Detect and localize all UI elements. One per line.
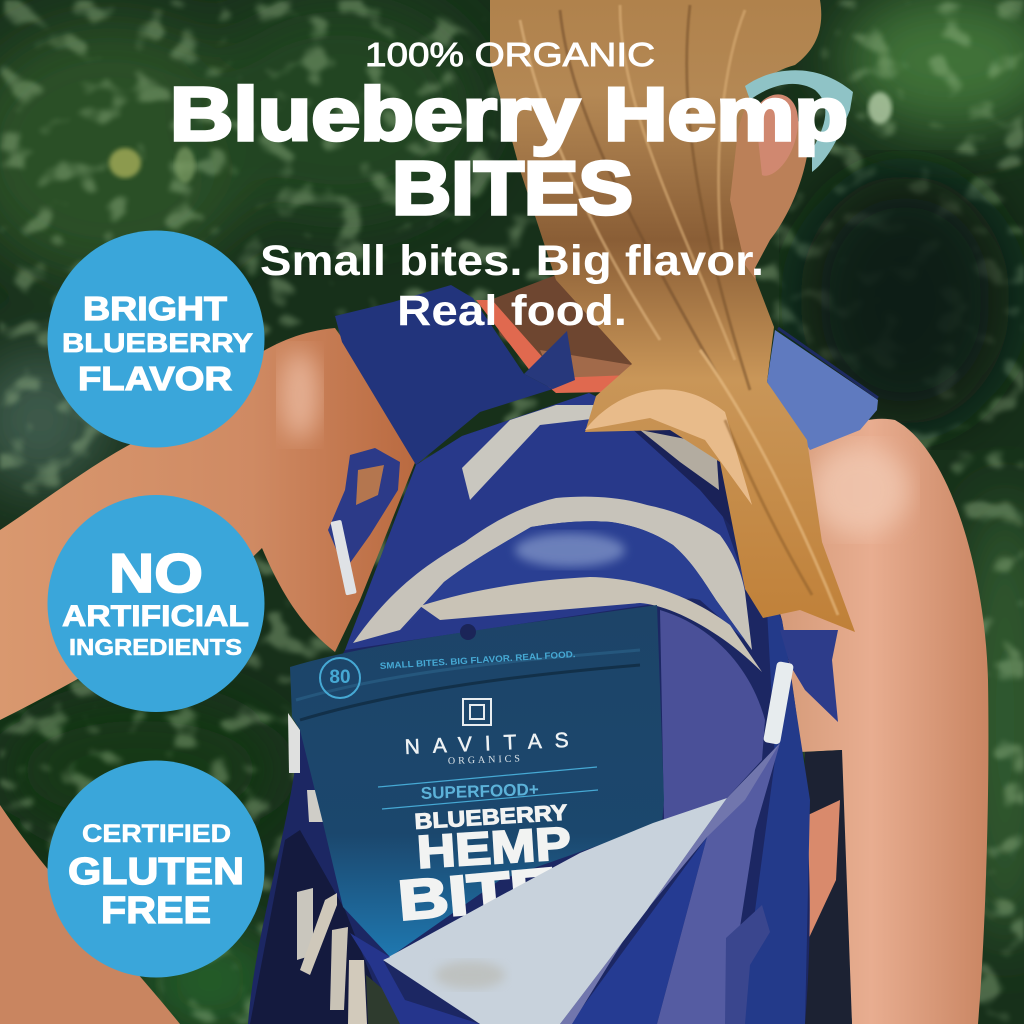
badge: certified gluten free: CERTIFIED: [82, 820, 231, 848]
badge: no artificial ingredients: INGREDIENTS: [69, 634, 242, 660]
neck and head: [600, 100, 810, 400]
inner purple side panel: [660, 610, 765, 820]
sunglasses: [745, 70, 853, 172]
product pouch: [290, 605, 664, 957]
text: pouch blueberry: BLUEBERRY: [414, 800, 568, 834]
badge: certified gluten free: GLUTEN: [68, 851, 244, 893]
left strap: [335, 285, 553, 465]
subtitle line 2: Real food.: [397, 287, 627, 335]
shiny pocket: [400, 521, 745, 640]
text: pouch brand: NAVITAS: [404, 729, 569, 759]
text: pouch hemp: HEMP: [415, 817, 572, 878]
left arm and shoulder: [0, 328, 420, 720]
blue rim: [350, 933, 480, 1024]
main body: [248, 393, 810, 1024]
dark interior under tail: [600, 400, 760, 560]
badge: no artificial ingredients: ARTIFICIAL: [62, 600, 249, 633]
grey handle: [462, 405, 600, 500]
icon: 80 calories badge: 80: [329, 667, 351, 688]
icon: navitas logo: [463, 699, 491, 725]
text: pouch tagline: SMALL BITES. BIG FLAVOR. REAL FOOD.: [380, 649, 576, 671]
lower zipper band: [420, 577, 762, 672]
right side band: [740, 590, 810, 1024]
icon: 80 calories badge: [320, 658, 360, 698]
right shoulder and arm: [775, 419, 988, 1024]
ear: [755, 94, 798, 176]
lower left forearm: [0, 805, 180, 1024]
badge: no artificial ingredients: [48, 495, 264, 712]
badge: certified gluten free: [48, 760, 264, 978]
subtitle line 1: Small bites. Big flavor.: [260, 237, 764, 285]
blue outer panel: [570, 837, 707, 1024]
dark lower left column: [250, 830, 390, 1024]
badge: bright blueberry flavor: [48, 230, 264, 448]
badge: certified gluten free: FREE: [101, 890, 211, 932]
text: pouch organics: ORGANICS: [448, 753, 520, 767]
purple edge stripe: [560, 743, 780, 1024]
white underside: [383, 798, 727, 1024]
text: pouch superfood: SUPERFOOD+: [420, 780, 539, 803]
eyebrow: 100% ORGANIC: [365, 36, 655, 73]
title line 1: Blueberry Hemp: [170, 72, 848, 156]
left webbing: [297, 888, 313, 960]
hair: [490, 0, 855, 632]
dark side gap: [805, 750, 852, 1024]
badge: bright blueberry flavor: BLUEBERRY: [62, 328, 253, 358]
top zipper band: [353, 497, 752, 650]
title block: [170, 36, 848, 335]
title line 2: BITES: [392, 146, 633, 230]
right strap: [767, 330, 878, 450]
mesh pocket: [725, 905, 770, 1024]
coral tank top: [476, 300, 632, 393]
badge: no artificial ingredients: NO: [109, 542, 203, 604]
backpack: [248, 285, 878, 1024]
light purple panel: [657, 743, 780, 1024]
badge: bright blueberry flavor: BRIGHT: [83, 290, 227, 327]
backpack flap: [350, 743, 780, 1024]
text: pouch bites: BITES: [396, 851, 605, 932]
left loop: [328, 448, 400, 570]
badge: bright blueberry flavor: FLAVOR: [78, 360, 232, 397]
